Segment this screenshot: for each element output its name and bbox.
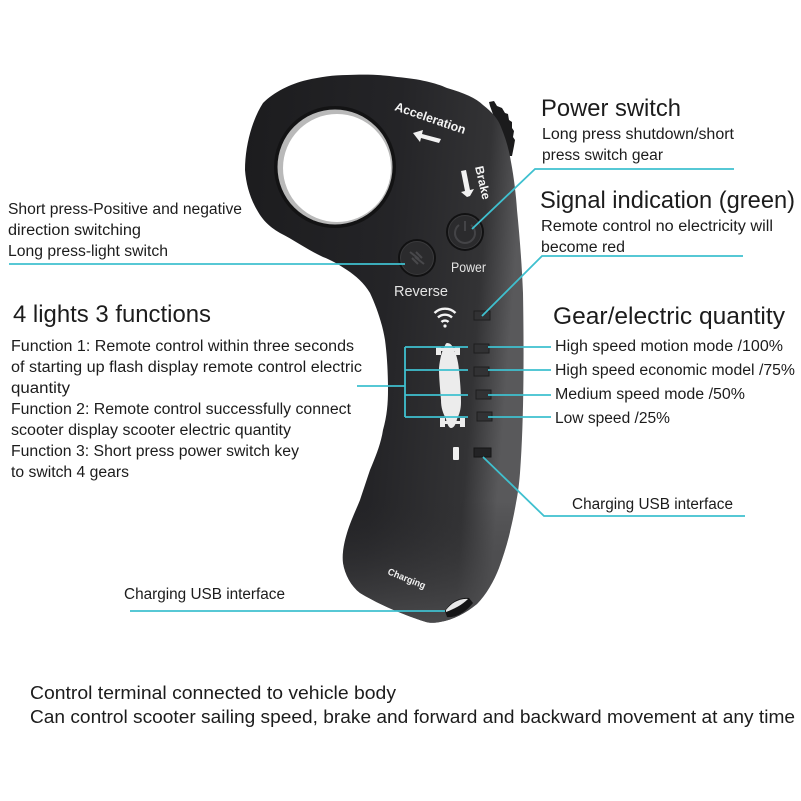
label: Reverse: Reverse [394, 283, 448, 300]
icon: brake arrow [461, 170, 474, 197]
text block: 4 lights 3 functions: 4 lights 3 functions [13, 301, 211, 328]
text block: power switch [541, 95, 735, 164]
text block: signal indication: become red [541, 239, 625, 256]
text block: signal indication [540, 187, 795, 256]
text block: 4 lights 3 functions: scooter display scooter electric quantity [11, 422, 291, 439]
text block: 4 lights 3 functions: Function 2: Remote control successfully connect [11, 401, 352, 418]
callout line: bottom charging interface [130, 610, 445, 612]
text block: reverse description [8, 201, 242, 260]
text block: bottom summary [30, 682, 795, 727]
text block: 4 lights 3 functions: Function 3: Short press power switch key [11, 443, 299, 460]
text block: reverse description: Short press-Positive and negative [8, 201, 242, 218]
label: Power: Power [451, 259, 486, 275]
text block: bottom summary: Can control scooter sailing speed, brake and forward and backward movement at any time [30, 706, 795, 727]
text block: reverse description: Long press-light switch [8, 243, 168, 260]
label: Brake: Brake [472, 165, 493, 201]
icon: wifi [434, 309, 456, 328]
reverse button [398, 239, 436, 277]
text block: 4 lights 3 functions: of starting up flash display remote control electric [11, 359, 362, 376]
power button [446, 213, 484, 251]
charging port [445, 598, 473, 617]
label: Charging: Charging [386, 567, 427, 592]
text block: power switch: press switch gear [542, 147, 663, 164]
lower body shading [343, 500, 516, 623]
callout lines: gear levels [488, 347, 551, 417]
text block: gear and electric quantity: Low speed /25% [555, 410, 670, 427]
text block: signal indication: Remote control no electricity will [541, 218, 773, 235]
label: Acceleration: Acceleration [393, 100, 468, 137]
text block: signal indication: Signal indication (green) [540, 187, 795, 214]
text block: gear and electric quantity: High speed economic model /75% [555, 362, 795, 379]
label: charging USB interface bottom: Charging USB interface [124, 586, 285, 603]
callout bracket: 4 lights [357, 347, 468, 417]
text block: gear and electric quantity: High speed motion mode /100% [555, 338, 783, 355]
indicator lights [474, 311, 492, 457]
text block: gear and electric quantity: Medium speed mode /50% [555, 386, 745, 403]
ring opening [274, 106, 396, 228]
text block: gear and electric quantity: Gear/electric quantity [553, 303, 785, 330]
remote control device [245, 75, 524, 623]
text block: power switch: Long press shutdown/short [542, 126, 735, 143]
icon: skateboard [436, 343, 465, 428]
text block: reverse description: direction switching [8, 222, 141, 239]
text block: 4 lights 3 functions: Function 1: Remote control within three seconds [11, 338, 354, 355]
text block: bottom summary: Control terminal connected to vehicle body [30, 682, 397, 703]
icon: battery [453, 447, 459, 460]
text block: 4 lights 3 functions: quantity [11, 380, 70, 397]
label: charging USB interface right: Charging USB interface [572, 496, 733, 513]
text block: power switch: Power switch [541, 95, 681, 122]
text block: 4 lights 3 functions: to switch 4 gears [11, 464, 129, 481]
icon: acceleration arrow [413, 130, 441, 143]
callout line: signal indication [482, 256, 743, 316]
text block: 4 lights 3 functions [11, 301, 362, 481]
callout line: reverse button [9, 263, 405, 265]
callout line: power switch [472, 169, 734, 229]
side gear knob [489, 101, 515, 156]
text block: gear and electric quantity [553, 303, 795, 427]
device body [245, 75, 524, 623]
callout line: right charging interface [483, 457, 745, 516]
